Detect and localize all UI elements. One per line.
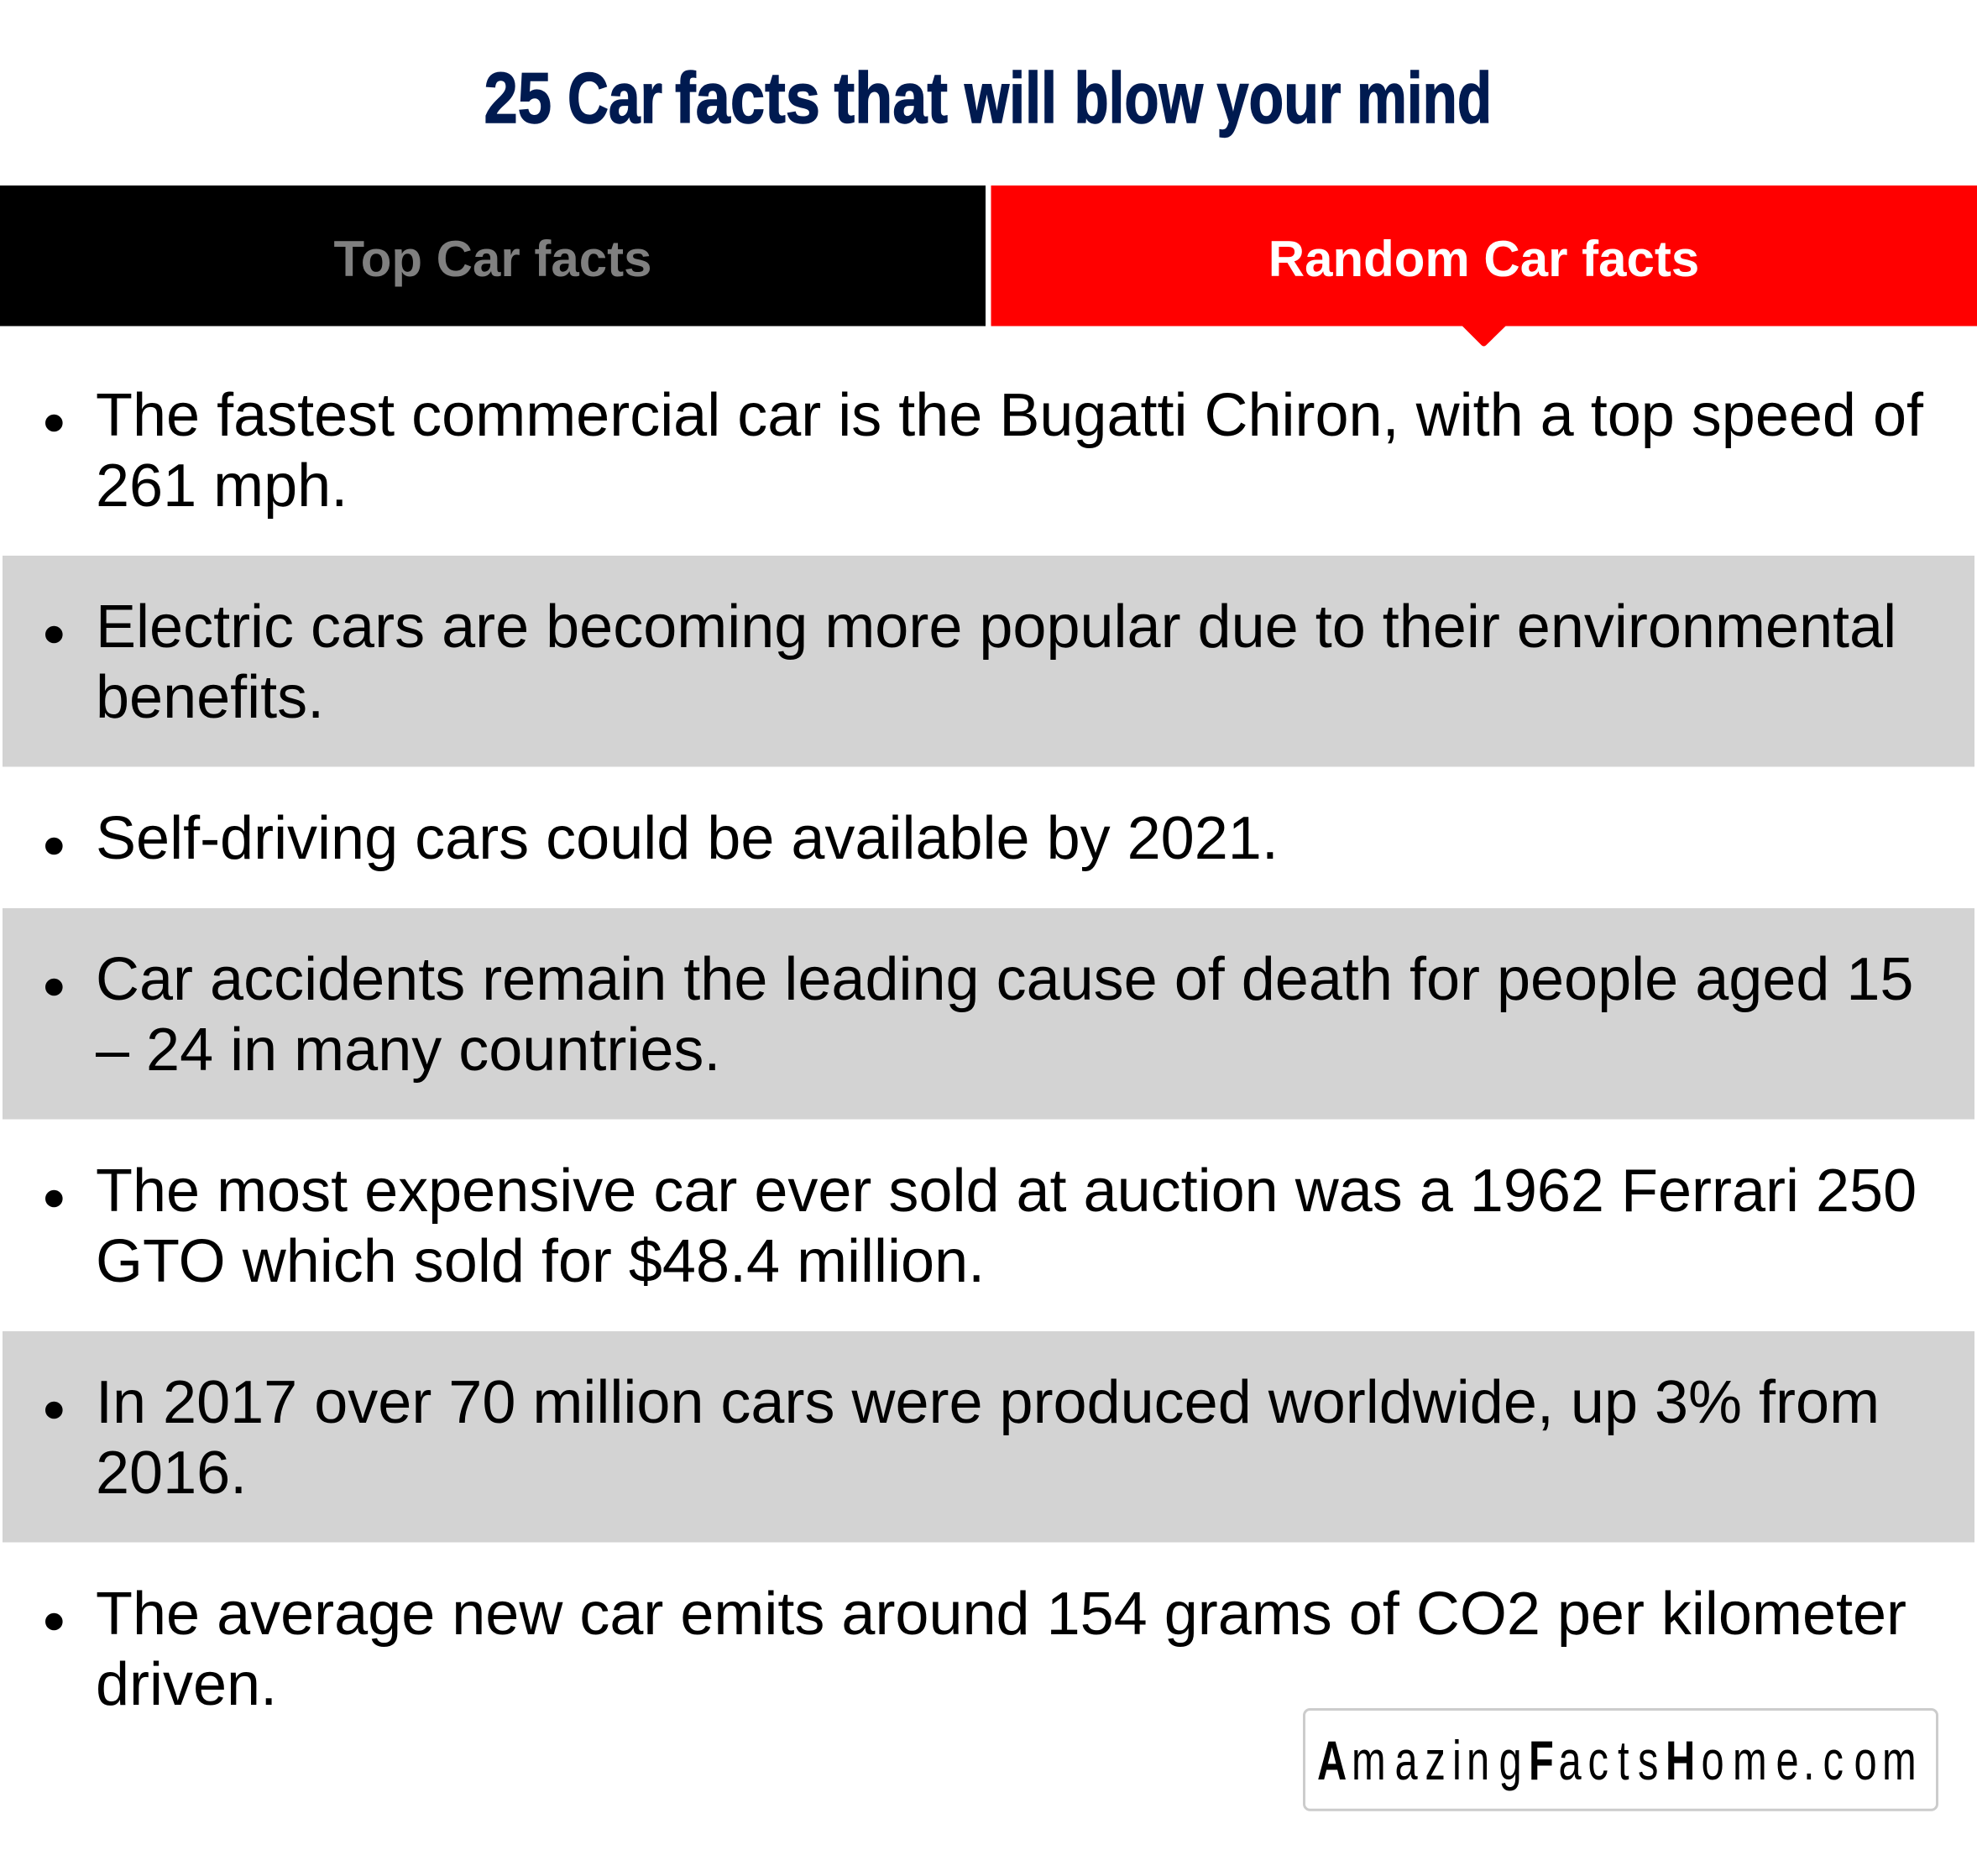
fact 6 band: In 2017 over 70 million cars were produced worldwide, up 3% from [96,1369,1880,1436]
logo badge: mazing [1352,1730,1522,1792]
tab: Random Car facts: Random Car facts [1268,231,1699,287]
fact 7: The average new car emits around 154 grams of CO2 per kilometer [96,1581,1906,1648]
title: that [834,59,948,138]
fact 6 band [3,1331,1974,1543]
title: Car [567,59,662,138]
title: your [1217,59,1342,138]
title: mind [1357,59,1492,138]
fact 5: GTO which sold for $48.4 million. [96,1228,985,1295]
fact 1: The fastest commercial car is the Bugatti Chiron, with a top speed of [96,382,1924,449]
fact 2 band [3,556,1974,767]
tab: Top Car facts [0,186,986,326]
logo badge: H [1666,1730,1695,1792]
fact 4 band [3,908,1974,1120]
logo badge: ome.com [1701,1730,1917,1792]
logo badge [1305,1709,1938,1810]
fact 2 band: Electric cars are becoming more popular due to their environmental [96,593,1896,661]
fact 4 band: – 24 in many countries. [96,1016,720,1084]
fact 2 band: benefits. [96,664,324,731]
title: blow [1075,59,1204,138]
title: 25 [484,59,552,138]
logo badge: A [1317,1730,1347,1792]
logo badge: acts [1559,1730,1658,1792]
fact 5: The most expensive car ever sold at auction was a 1962 Ferrari 250 [96,1157,1917,1225]
tab: Top Car facts: Top Car facts [334,231,651,287]
title [484,59,1492,138]
fact 7: driven. [96,1651,277,1718]
title: will [964,59,1057,138]
fact 3: Self-driving cars could be available by 2021. [96,805,1279,872]
logo badge: F [1529,1730,1554,1792]
tab: Random Car facts [991,186,1977,346]
fact 1 [45,382,1924,520]
fact 7 [45,1581,1906,1718]
fact 1: 261 mph. [96,452,348,520]
fact 5 [45,1157,1917,1295]
fact 4 band: Car accidents remain the leading cause of death for people aged 15 [96,946,1913,1013]
fact 6 band: 2016. [96,1440,247,1507]
title: facts [675,59,820,138]
